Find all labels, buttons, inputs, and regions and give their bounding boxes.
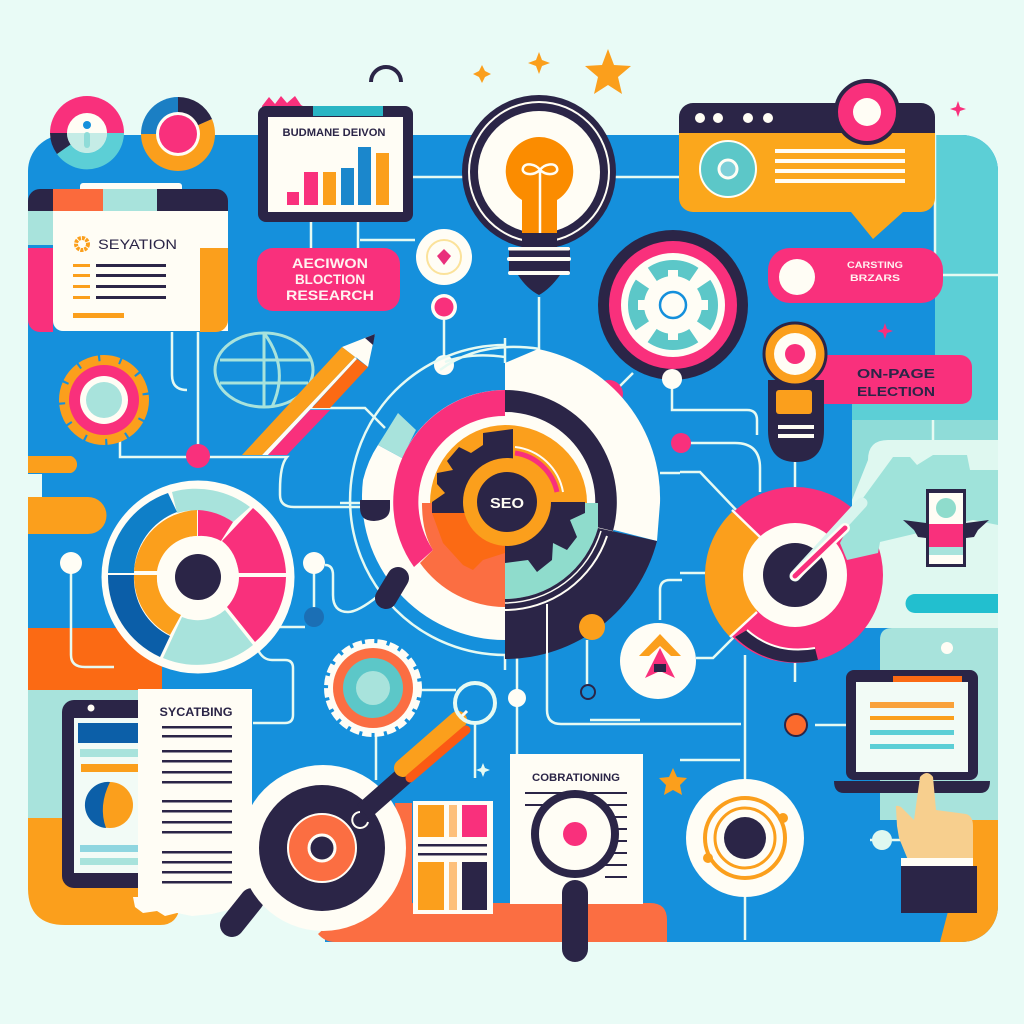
panel: sycatbing document: SYCATBING: [160, 705, 232, 719]
label: keyword research: AECIWON: [292, 255, 368, 271]
small sparkle: [476, 763, 490, 777]
panel: sycatbing document: [133, 689, 252, 916]
label: on-page election: [812, 355, 972, 404]
panel: colour blocks: [413, 801, 493, 914]
chart: central SEO wheel: [350, 338, 660, 660]
label: on-page election: ELECTION: [857, 384, 935, 399]
panel: seyation card: SEYATION: [98, 236, 177, 252]
icon: pointing hand: [896, 773, 977, 913]
panel: seyation card: [28, 183, 228, 332]
icon: small target pin: [416, 229, 472, 320]
chart: left donut: [103, 482, 293, 672]
panel: tablet: [62, 700, 138, 888]
chart: right target dial: [705, 487, 883, 663]
label: keyword research: BLOCTION: [295, 271, 365, 287]
panel: browser window card: [679, 81, 935, 239]
icon: orange sun gear: [65, 361, 143, 439]
panel: cobrationing document: COBRATIONING: [532, 772, 620, 784]
icon: ring chart: [141, 97, 215, 171]
label: capsule: BRZARS: [850, 273, 900, 283]
label: capsule: CARSTING: [847, 260, 903, 270]
icon: large magnifier: [232, 683, 495, 931]
panel: business chart: [258, 96, 413, 222]
label: keyword research: [257, 248, 400, 311]
icon: house badge: [620, 623, 696, 699]
panel: business chart: BUDMANE DEIVON: [282, 127, 386, 139]
icon: star: [659, 768, 687, 795]
label: capsule: [768, 248, 943, 303]
icon: laptop: [834, 670, 990, 793]
icon: document magnifier: [535, 794, 615, 962]
chart: central SEO wheel: SEO: [490, 495, 524, 512]
panel: cobrationing document: [510, 754, 643, 904]
icon: hand and phone: [795, 455, 998, 576]
orange base blob: [318, 803, 667, 942]
connector nodes: [60, 355, 953, 850]
icon: info circle: [50, 96, 124, 169]
top ornaments: [371, 49, 966, 339]
icon: capsule device: [764, 323, 826, 462]
icon: gear badge: [328, 643, 418, 733]
label: on-page election: ON-PAGE: [857, 366, 935, 381]
icon: orbit target: [686, 779, 804, 897]
icon: pencil: [242, 334, 375, 455]
connector lines: [71, 135, 998, 940]
icon: gear circle: [598, 230, 748, 380]
pink node by wheel: [595, 380, 623, 408]
orange node: [579, 614, 605, 640]
icon: globe: [215, 333, 313, 407]
label: keyword research: RESEARCH: [286, 287, 374, 303]
blue main panel: [28, 135, 998, 945]
icon: light bulb: [462, 95, 616, 295]
